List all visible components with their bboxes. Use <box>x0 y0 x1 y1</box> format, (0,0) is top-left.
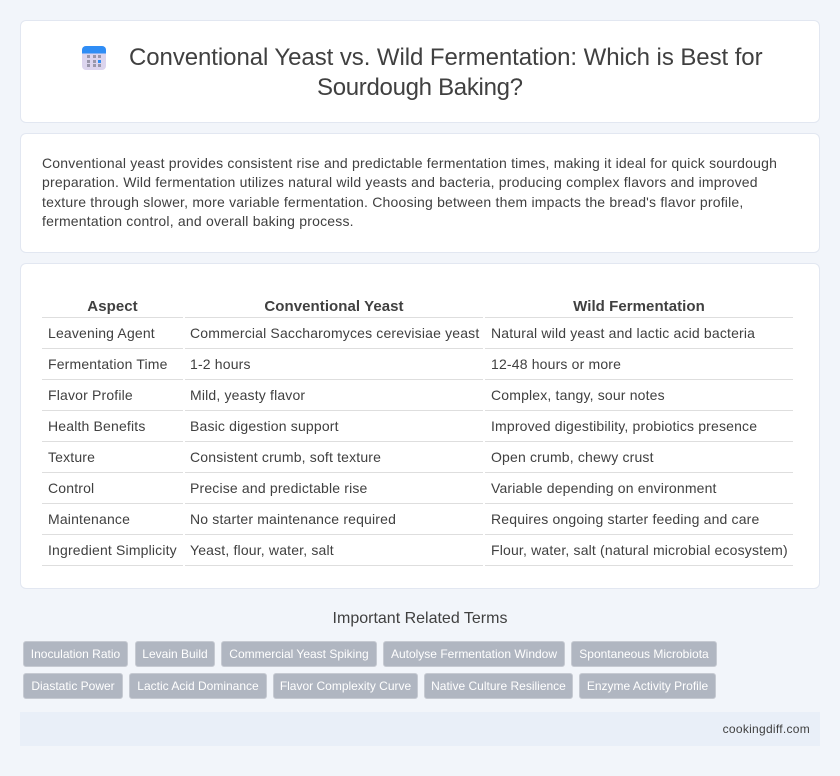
comparison table: Commercial Saccharomyces cerevisiae yeast <box>190 325 479 341</box>
tag <box>221 641 377 667</box>
tag <box>579 673 716 699</box>
comparison table: Flour, water, salt (natural microbial ecosystem) <box>491 542 788 558</box>
comparison table: No starter maintenance required <box>190 511 396 527</box>
comparison table: Aspect <box>87 298 138 315</box>
comparison table: 1-2 hours <box>190 356 251 372</box>
comparison table: Fermentation Time <box>48 356 168 372</box>
tag: Spontaneous Microbiota <box>579 647 709 661</box>
tag: Levain Build <box>142 647 208 661</box>
related terms tags <box>23 641 717 699</box>
tag <box>23 673 123 699</box>
comparison table: Improved digestibility, probiotics presence <box>491 418 757 434</box>
tag: Lactic Acid Dominance <box>137 679 259 693</box>
footer source: cookingdiff.com <box>723 722 810 736</box>
comparison table: Flavor Profile <box>48 387 133 403</box>
comparison table: Conventional Yeast <box>264 298 404 315</box>
tag: Autolyse Fermentation Window <box>391 647 557 661</box>
comparison table <box>42 298 793 566</box>
comparison table: Consistent crumb, soft texture <box>190 449 381 465</box>
description card <box>20 133 820 253</box>
description text: Conventional yeast provides consistent rise and predictable fermentation times, making it ideal for quick sourdough <box>42 155 777 171</box>
comparison table: Maintenance <box>48 511 130 527</box>
tag <box>135 641 215 667</box>
comparison table: Leavening Agent <box>48 325 155 341</box>
tag <box>571 641 717 667</box>
tag <box>383 641 565 667</box>
comparison table: Wild Fermentation <box>573 298 705 315</box>
comparison table: Health Benefits <box>48 418 146 434</box>
comparison table: Yeast, flour, water, salt <box>190 542 334 558</box>
comparison table: Open crumb, chewy crust <box>491 449 654 465</box>
comparison table: Mild, yeasty flavor <box>190 387 305 403</box>
comparison table: Basic digestion support <box>190 418 339 434</box>
tag: Flavor Complexity Curve <box>280 679 411 693</box>
comparison table: Ingredient Simplicity <box>48 542 177 558</box>
tag <box>129 673 267 699</box>
tag: Enzyme Activity Profile <box>587 679 708 693</box>
comparison table: Precise and predictable rise <box>190 480 368 496</box>
comparison table: Complex, tangy, sour notes <box>491 387 665 403</box>
tag: Inoculation Ratio <box>31 647 120 661</box>
comparison table: Variable depending on environment <box>491 480 717 496</box>
icon: calendar <box>82 46 106 70</box>
comparison table: Requires ongoing starter feeding and care <box>491 511 759 527</box>
comparison table: 12-48 hours or more <box>491 356 621 372</box>
description text: fermentation control, and overall baking process. <box>42 213 354 229</box>
comparison table: Control <box>48 480 94 496</box>
tag <box>424 673 573 699</box>
tag: Native Culture Resilience <box>431 679 566 693</box>
header card: Sourdough Baking? <box>317 74 523 101</box>
description text <box>42 155 777 229</box>
tag <box>273 673 418 699</box>
title <box>129 44 762 101</box>
comparison table: Natural wild yeast and lactic acid bacteria <box>491 325 755 341</box>
related terms heading: Important Related Terms <box>333 610 507 627</box>
description text: preparation. Wild fermentation utilizes natural wild yeasts and bacteria, producing complex flavors and improved <box>42 174 758 190</box>
tag: Diastatic Power <box>31 679 115 693</box>
comparison table: Texture <box>48 449 95 465</box>
comparison table card <box>20 263 820 589</box>
tag: Commercial Yeast Spiking <box>229 647 369 661</box>
tag <box>23 641 128 667</box>
header card: Conventional Yeast vs. Wild Fermentation: Which is Best for <box>129 44 762 71</box>
description text: texture through slower, more variable fermentation. Choosing between them impacts the bread's flavor profile, <box>42 194 744 210</box>
footer bar <box>20 712 820 746</box>
header card <box>20 20 820 123</box>
